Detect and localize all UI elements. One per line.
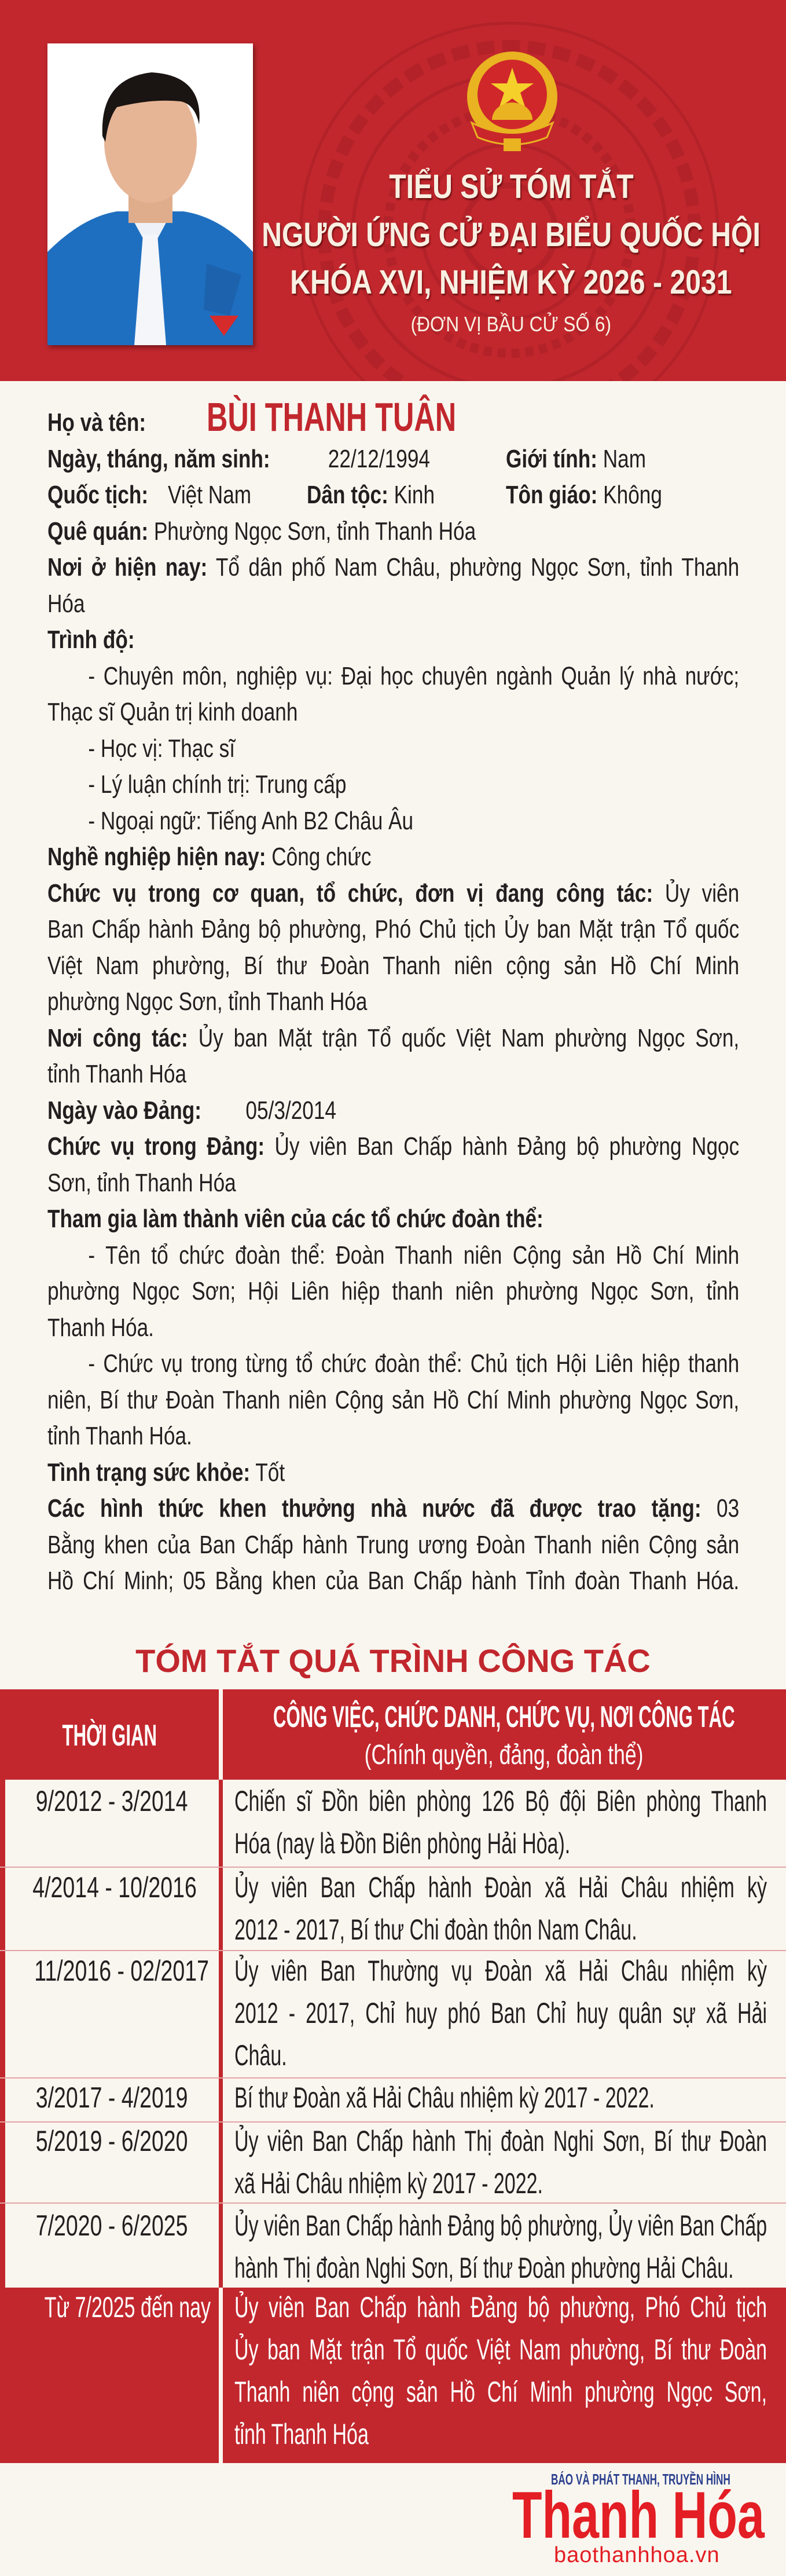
text block: biography details: Thanh Hóa. [47,1313,154,1341]
title: TIỂU SỬ TÓM TẮT [389,168,633,206]
row 4: 3/2017 - 4/2019 [36,2081,188,2114]
candidate name: BÙI THANH TUÂN [207,394,456,440]
text block: biography details: Nghề nghiệp hiện nay: Công chức [47,843,371,871]
row 3 [0,1950,786,2077]
drum pattern background [300,22,719,381]
table header: CÔNG VIỆC, CHỨC DANH, CHỨC VỤ, NƠI CÔNG TÁC [273,1700,735,1734]
row 2: 4/2014 - 10/2016 [32,1871,197,1904]
photo: candidate portrait [47,43,253,345]
text block: biography details: Hóa [47,590,85,617]
row 4: Bí thư Đoàn xã Hải Châu nhiệm kỳ 2017 - 2022. [234,2081,655,2114]
row 5 [0,2121,786,2202]
row 5: Ủy viên Ban Chấp hành Thị đoàn Nghi Sơn, Bí thư Đoàn [234,2125,767,2157]
row 2: 2012 - 2017, Bí thư Chi đoàn thôn Nam Châu. [234,1913,637,1946]
row 7: current position (highlighted): Từ 7/2025 đến nay [45,2291,211,2323]
row 4 [0,2077,786,2121]
title [262,167,761,302]
row 5: xã Hải Châu nhiệm kỳ 2017 - 2022. [234,2167,543,2200]
row 5: 5/2019 - 6/2020 [36,2125,188,2157]
header banner [0,0,786,381]
logo: Báo Thanh Hóa: Thanh Hóa [512,2479,765,2552]
logo: Báo Thanh Hóa: baothanhhoa.vn [554,2543,720,2567]
text block: biography details: - Ngoại ngữ: Tiếng Anh B2 Châu Âu [88,806,413,835]
table header [0,1689,786,1780]
text block: biography details: Sơn, tỉnh Thanh Hóa [47,1169,236,1196]
text block: biography details: Chức vụ trong Đảng: Ủy viên Ban Chấp hành Đảng bộ phường Ngọc [47,1132,739,1161]
text block: biography details: Ngày vào Đảng: [47,1096,201,1125]
heading: work history: TÓM TẮT QUÁ TRÌNH CÔNG TÁC [135,1642,651,1679]
row 6: 7/2020 - 6/2025 [36,2209,188,2242]
row 3: 2012 - 2017, Chỉ huy phó Ban Chỉ huy quân sự xã Hải [234,1997,767,2029]
text block: biography details: Các hình thức khen thưởng nhà nước đã được trao tặng: 03 [47,1494,739,1523]
text block: biography details: Tham gia làm thành viên của các tổ chức đoàn thể: [47,1205,543,1233]
row 1: Hóa (nay là Đồn Biên phòng Hải Hòa). [234,1827,570,1860]
text block: biography details: Giới tính: Nam [506,445,646,473]
row 2: Ủy viên Ban Chấp hành Đoàn xã Hải Châu nhiệm kỳ [234,1871,767,1904]
text block: biography details: Ban Chấp hành Đảng bộ phường, Phó Chủ tịch Ủy ban Mặt trận Tổ quốc [47,915,739,943]
text block: biography details: Dân tộc: Kinh [307,481,435,509]
row 6: hành Thị đoàn Nghi Sơn, Bí thư Đoàn phường Hải Châu. [234,2252,734,2284]
icon: national emblem [467,52,557,151]
text block: biography details: - Chuyên môn, nghiệp vụ: Đại học chuyên ngành Quản lý nhà nước; [88,661,739,690]
text block: biography details: Quê quán: Phường Ngọc Sơn, tỉnh Thanh Hóa [47,517,476,546]
row 6 [0,2202,786,2288]
text block: biography details: - Chức vụ trong từng tổ chức đoàn thể: Chủ tịch Hội Liên hiệp thanh [88,1349,739,1378]
text block: biography details: niên, Bí thư Đoàn Thanh niên Cộng sản Hồ Chí Minh phường Ngọc Sơn, [47,1385,739,1414]
text block: biography details: phường Ngọc Sơn; Hội Liên hiệp thanh niên phường Ngọc Sơn, tỉnh [47,1277,739,1305]
text block: biography details: Việt Nam [168,481,251,509]
text block: biography details: Họ và tên: [47,408,146,437]
row 1: 9/2012 - 3/2014 [36,1785,188,1817]
text block: biography details: - Học vị: Thạc sĩ [88,734,235,762]
text block: biography details: Việt Nam phường, Bí thư Đoàn Thanh niên cộng sản Hồ Chí Minh [47,951,739,980]
row 7: current position (highlighted): Ủy ban Mặt trận Tổ quốc Việt Nam phường, Bí thư Đoàn [234,2333,767,2366]
title: KHÓA XVI, NHIỆM KỲ 2026 - 2031 [290,264,732,301]
row 7: current position (highlighted): Ủy viên Ban Chấp hành Đảng bộ phường, Phó Chủ tịch [234,2291,767,2323]
row 7: current position (highlighted) [0,2288,786,2463]
text block: biography details: Quốc tịch: [47,481,148,509]
text block: biography details: tỉnh Thanh Hóa [47,1060,186,1088]
text block: biography details: tỉnh Thanh Hóa. [47,1422,192,1450]
text block: biography details: Hồ Chí Minh; 05 Bằng khen của Ban Chấp hành Tỉnh đoàn Thanh Hóa. [47,1567,739,1595]
subtitle: electoral unit: (ĐƠN VỊ BẦU CỬ SỐ 6) [411,312,611,336]
text block: biography details: - Lý luận chính trị: Trung cấp [88,770,347,799]
row 3: Châu. [234,2039,287,2072]
text block: biography details: 05/3/2014 [245,1096,336,1125]
table header: (Chính quyền, đảng, đoàn thể) [365,1740,644,1770]
logo: Báo Thanh Hóa: BÁO VÀ PHÁT THANH, TRUYỀN HÌNH [551,2471,730,2488]
text block: biography details: Ngày, tháng, năm sinh: [47,445,270,473]
text block: biography details: Bằng khen của Ban Chấp hành Trung ương Đoàn Thanh niên Cộng sản [47,1530,739,1559]
text block: biography details: Nơi ở hiện nay: Tổ dân phố Nam Châu, phường Ngọc Sơn, tỉnh Thanh [47,553,739,581]
table: work history [0,1689,786,2288]
row 7: current position (highlighted): Thanh niên cộng sản Hồ Chí Minh phường Ngọc Sơn, [234,2376,767,2408]
text block: biography details [47,408,739,1595]
text block: biography details: phường Ngọc Sơn, tỉnh Thanh Hóa [47,987,367,1016]
text block: biography details: - Tên tổ chức đoàn thể: Đoàn Thanh niên Cộng sản Hồ Chí Minh [88,1241,739,1269]
text block: biography details: Tình trạng sức khỏe: Tốt [47,1458,285,1486]
row 2 [0,1867,786,1950]
row 7: current position (highlighted): tỉnh Thanh Hóa [234,2418,369,2450]
table borders [0,1780,5,2288]
text block: biography details: Thạc sĩ Quản trị kinh doanh [47,698,297,726]
text block: biography details: Nơi công tác: Ủy ban Mặt trận Tổ quốc Việt Nam phường Ngọc Sơn, [47,1024,739,1052]
row 1 [36,1785,767,1860]
text block: biography details: Tôn giáo: Không [506,481,662,509]
text block: biography details: Chức vụ trong cơ quan, tổ chức, đơn vị đang công tác: Ủy viên [47,879,739,907]
title: NGƯỜI ỨNG CỬ ĐẠI BIỂU QUỐC HỘI [262,216,761,254]
text block: biography details: 22/12/1994 [328,445,430,473]
table header: THỜI GIAN [62,1719,157,1752]
text block: biography details: Trình độ: [47,625,135,654]
row 3: 11/2016 - 02/2017 [34,1955,209,1987]
row 1: Chiến sĩ Đồn biên phòng 126 Bộ đội Biên phòng Thanh [234,1785,767,1817]
row 6: Ủy viên Ban Chấp hành Đảng bộ phường, Ủy viên Ban Chấp [234,2209,767,2242]
row 3: Ủy viên Ban Thường vụ Đoàn xã Hải Châu nhiệm kỳ [234,1955,767,1987]
